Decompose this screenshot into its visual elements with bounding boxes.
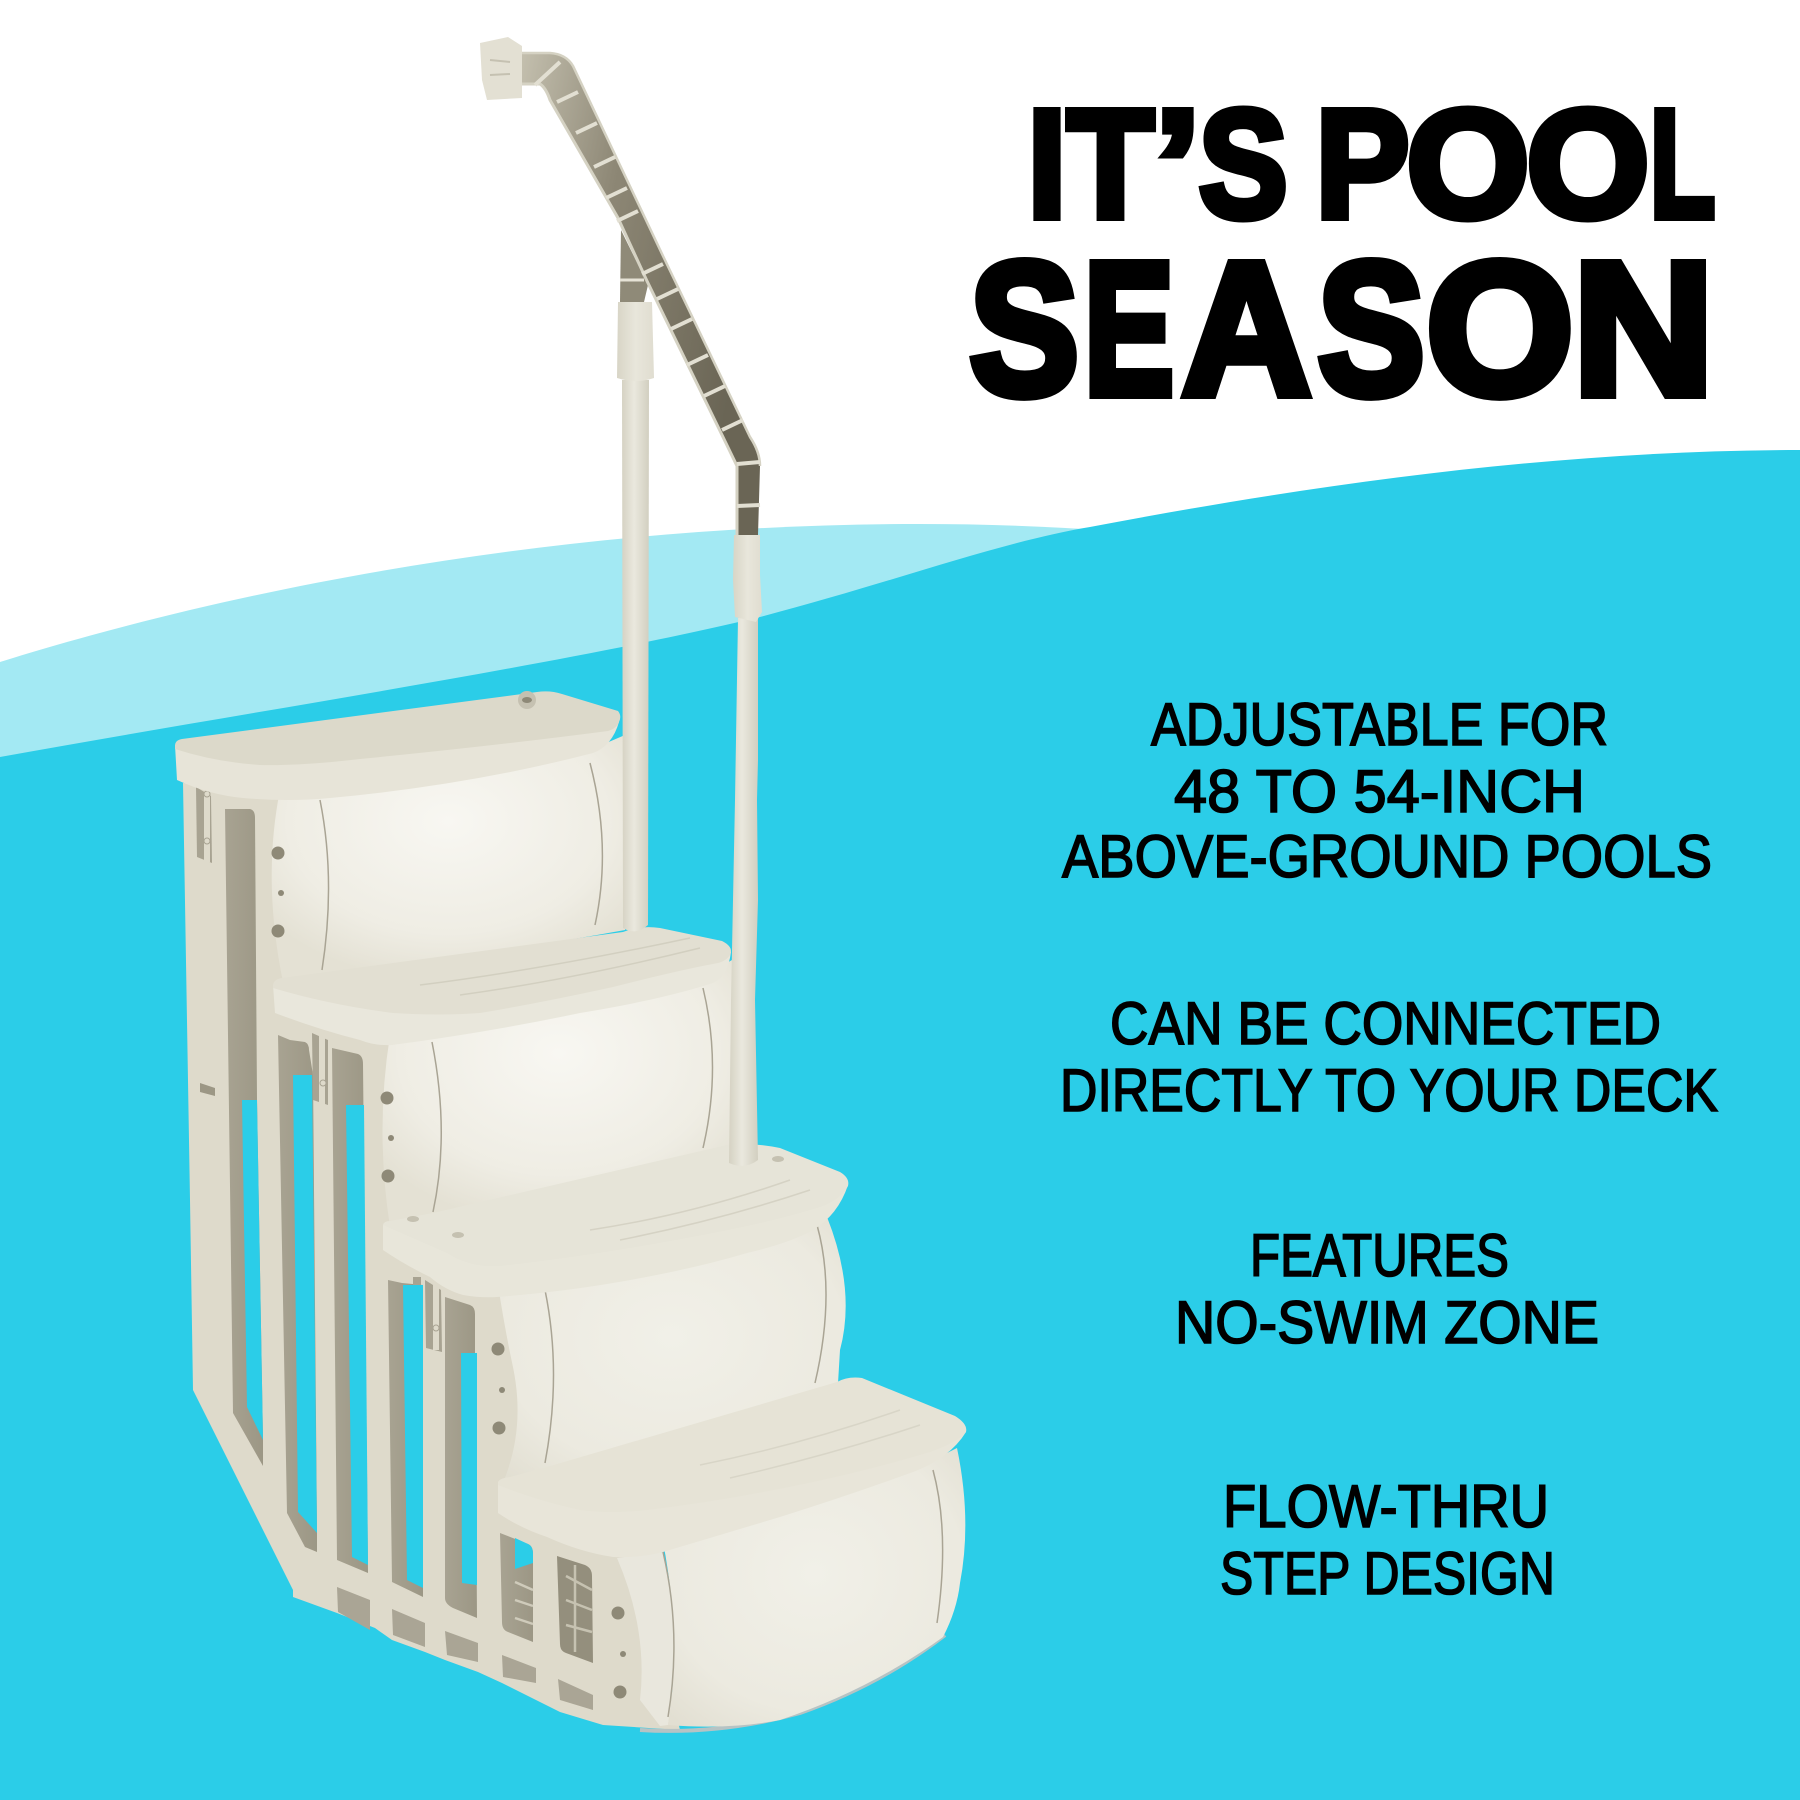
riser [498, 1215, 846, 1485]
title line 2: E [1084, 224, 1174, 435]
tread top [273, 927, 731, 1014]
bolt holes [380, 1092, 394, 1182]
riser [663, 1448, 965, 1727]
title line 1: P [1316, 78, 1409, 250]
slot E [445, 1297, 477, 1618]
feature: no-swim zone: FEATURES [1250, 1222, 1509, 1289]
title line 1: O [1526, 78, 1650, 250]
title line 1: I [1028, 78, 1066, 250]
feature: adjustable: ABOVE-GROUND POOLS [1062, 823, 1712, 890]
clip slot lower [425, 1280, 442, 1352]
feature: no-swim zone [1175, 1222, 1599, 1356]
tread top [498, 1378, 966, 1512]
handrail poles [617, 302, 762, 1166]
feature: flow-thru [1220, 1473, 1555, 1607]
tread top [175, 691, 620, 765]
feature: adjustable [1062, 691, 1712, 890]
small notch [200, 1083, 215, 1096]
title line 1: O [1406, 78, 1530, 250]
side cover [617, 1552, 674, 1726]
front pole [729, 618, 758, 1166]
feature: adjustable: 48 TO 54-INCH [1174, 758, 1585, 825]
title line 2: O [1426, 224, 1574, 435]
product photo: pool entry steps [175, 37, 966, 1731]
rear bracket [620, 230, 648, 302]
frame body [183, 783, 680, 1730]
tread top [383, 1144, 848, 1266]
title line 2: N [1573, 224, 1714, 435]
title line 1: ’ [1155, 78, 1200, 250]
rail edges [522, 84, 737, 535]
slot B [278, 1035, 317, 1552]
tread edge [273, 950, 731, 1045]
clip slot upper [196, 787, 212, 863]
title line 1: S [1199, 78, 1288, 250]
rail channel [510, 52, 760, 535]
front sleeve [733, 535, 762, 622]
title line 1: L [1650, 78, 1715, 250]
title line 2: S [1318, 224, 1425, 435]
bolt holes [272, 846, 284, 938]
bolt holes [612, 1606, 626, 1698]
feature: adjustable: ADJUSTABLE FOR [1151, 691, 1608, 758]
light blue wave [0, 524, 1100, 800]
top step [175, 691, 625, 982]
slot G [557, 1556, 593, 1663]
mounting block [480, 37, 522, 100]
feature: no-swim zone: NO-SWIM ZONE [1175, 1289, 1599, 1356]
slot A [225, 809, 263, 1466]
feature: deck connection: DIRECTLY TO YOUR DECK [1060, 1057, 1718, 1124]
title line 2: A [1182, 224, 1311, 435]
slot D [388, 1280, 423, 1597]
feature: deck connection: CAN BE CONNECTED [1110, 990, 1661, 1057]
tread edge [498, 1432, 966, 1557]
riser [382, 960, 735, 1227]
title line 2: S [970, 224, 1079, 435]
rail ribs [535, 62, 760, 506]
feature: flow-thru: FLOW-THRU [1223, 1473, 1549, 1540]
side frame with slots [183, 783, 680, 1730]
handrail [480, 37, 760, 535]
tread edge [175, 722, 619, 800]
tread edge [383, 1185, 848, 1297]
feature: flow-thru: STEP DESIGN [1220, 1540, 1555, 1607]
slot C [332, 1048, 368, 1573]
clip slot middle [312, 1033, 328, 1105]
water background wave [0, 450, 1800, 1800]
rear sleeve [617, 302, 654, 381]
title line 1: T [1067, 78, 1154, 250]
rear pole [622, 380, 649, 931]
slot F [500, 1533, 533, 1642]
bolt holes [492, 1342, 506, 1434]
riser [272, 735, 625, 982]
bottom step [498, 1378, 966, 1731]
underside shadow [640, 1635, 945, 1731]
third step [383, 1144, 848, 1485]
feature: deck connection [1060, 990, 1718, 1124]
lower row openings [337, 1587, 593, 1710]
second step [273, 927, 735, 1227]
title [970, 78, 1715, 435]
